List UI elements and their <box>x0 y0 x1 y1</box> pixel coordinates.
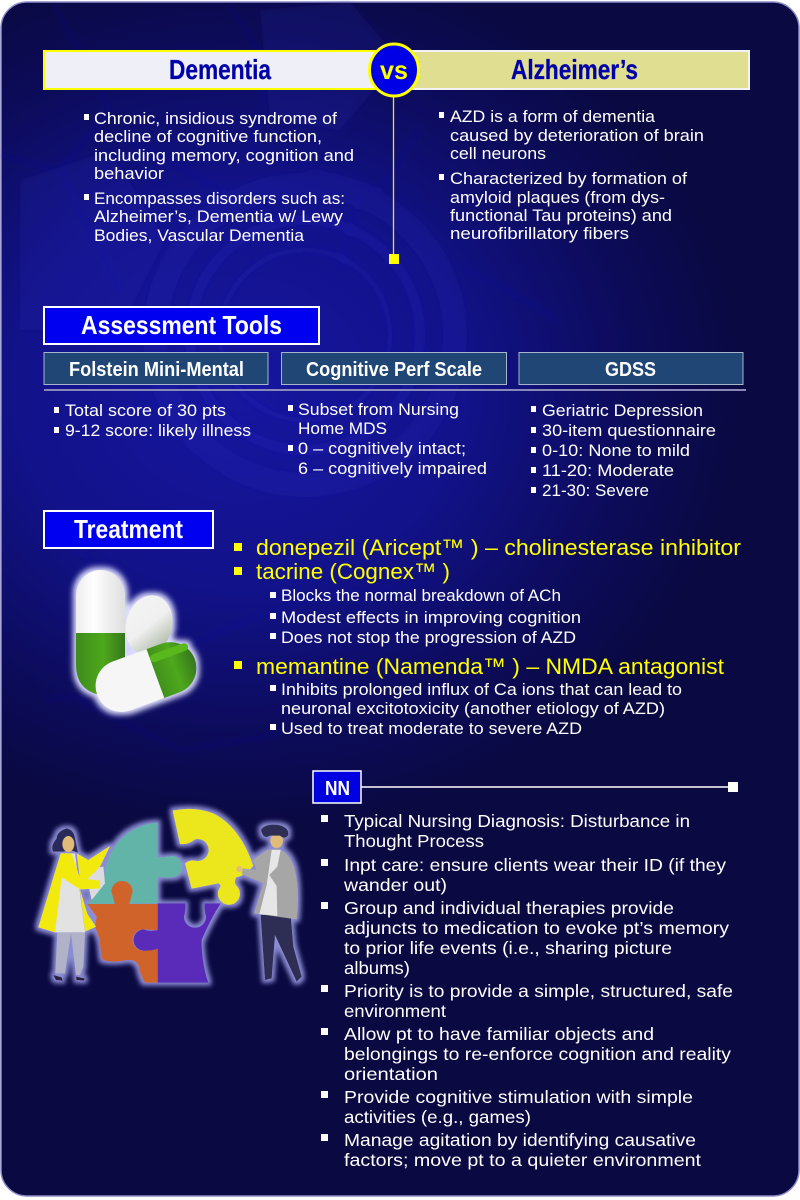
vs connector line <box>389 95 399 264</box>
heading: nn with rule <box>313 771 738 803</box>
text block: alzheimer's description: caused by deterioration of brain <box>450 126 704 145</box>
teal piece <box>88 823 182 904</box>
list: nursing notes: Priority is to provide a simple, structured, safe <box>344 981 733 1001</box>
text block: cognitive perf scale details: 6 – cognitively impaired <box>298 459 487 478</box>
yellow piece <box>173 809 253 905</box>
text block: dementia description: Alzheimer’s, Dementia w/ Lewy <box>94 207 344 226</box>
text block: cognitive perf scale details <box>288 400 487 478</box>
text block: folstein details: Total score of 30 pts <box>65 401 226 420</box>
tab: gdss <box>519 352 743 384</box>
list: nursing notes: Group and individual therapies provide <box>344 898 674 918</box>
vs badge: vs <box>380 55 408 85</box>
heading: nn with rule: NN <box>325 777 350 800</box>
list: drug treatments: Used to treat moderate to severe AZD <box>281 719 582 738</box>
purple piece <box>133 903 221 983</box>
text block: alzheimer's description: neurofibrillatory fibers <box>450 224 629 243</box>
text block: cognitive perf scale details: 0 – cognitively intact; <box>298 439 466 458</box>
text block: folstein details: 9-12 score: likely illness <box>65 421 251 440</box>
text block: dementia description: Chronic, insidious syndrome of <box>94 109 337 128</box>
woman <box>38 828 110 981</box>
list: drug treatments: memantine (Namenda™ ) – NMDA antagonist <box>256 654 725 679</box>
heading: assessment tools: Assessment Tools <box>81 310 282 340</box>
text block: alzheimer's description: AZD is a form of dementia <box>450 107 656 126</box>
text block: gdss details: 0-10: None to mild <box>542 441 690 460</box>
list: drug treatments: neuronal excitotoxicity (another etiology of AZD) <box>281 699 665 718</box>
dementia title bar: Dementia <box>169 54 271 85</box>
tab: folstein mini-mental: Folstein Mini-Mental <box>69 358 244 381</box>
heading: assessment tools <box>44 307 319 344</box>
list: drug treatments: Does not stop the progression of AZD <box>281 628 576 647</box>
text block: gdss details: 11-20: Moderate <box>542 461 674 480</box>
list: nursing notes: orientation <box>344 1064 438 1084</box>
text block: gdss details: Geriatric Depression <box>542 401 703 420</box>
alzheimer's title bar: Alzheimer’s <box>511 54 638 85</box>
man <box>236 825 302 982</box>
text block: cognitive perf scale details: Subset from Nursing <box>298 400 459 419</box>
tab: cognitive perf scale: Cognitive Perf Scale <box>306 358 482 381</box>
alzheimer's title bar <box>402 51 749 89</box>
text block: alzheimer's description: functional Tau proteins) and <box>450 206 672 225</box>
tab: cognitive perf scale <box>282 352 506 384</box>
list: nursing notes: Provide cognitive stimulation with simple <box>344 1087 693 1107</box>
list: nursing notes: Typical Nursing Diagnosis: Disturbance in <box>344 811 690 831</box>
list: nursing notes: environment <box>344 1001 446 1021</box>
text block: dementia description: including memory, cognition and <box>94 146 354 165</box>
orange piece <box>87 881 158 983</box>
text block: alzheimer's description <box>439 107 704 243</box>
list: drug treatments <box>234 535 742 738</box>
tab: gdss: GDSS <box>605 358 656 381</box>
vs badge <box>370 44 418 96</box>
list: nursing notes: Inpt care: ensure clients wear their ID (if they <box>344 855 726 875</box>
list: nursing notes: albums) <box>344 958 410 978</box>
list: drug treatments: donepezil (Aricept™ ) – cholinesterase inhibitor <box>256 535 742 560</box>
list: nursing notes: to prior life events (i.e., sharing picture <box>344 938 672 958</box>
text block: folstein details <box>54 401 251 440</box>
text block: cognitive perf scale details: Home MDS <box>298 419 387 438</box>
list: drug treatments: tacrine (Cognex™ ) <box>256 559 450 584</box>
list: nursing notes: Allow pt to have familiar objects and <box>344 1024 654 1044</box>
icon: capsule pills <box>76 570 204 719</box>
heading: treatment <box>44 511 213 548</box>
illustration: puzzle head with two people <box>38 809 302 983</box>
text block: dementia description <box>84 109 354 245</box>
list: nursing notes: belongings to re-enforce cognition and reality <box>344 1044 731 1064</box>
text block: dementia description: Encompasses disorders such as: <box>94 189 345 208</box>
list: nursing notes: Thought Process <box>344 831 484 851</box>
tab: folstein mini-mental <box>44 352 268 384</box>
text block: dementia description: decline of cognitive function, <box>94 127 322 146</box>
text block: alzheimer's description: cell neurons <box>450 144 546 163</box>
panel: assessment tool headers <box>44 352 746 390</box>
list: nursing notes <box>321 811 733 1170</box>
list: nursing notes: activities (e.g., games) <box>344 1107 531 1127</box>
heading: treatment: Treatment <box>74 514 183 544</box>
text block: gdss details: 30-item questionnaire <box>542 421 716 440</box>
list: nursing notes: adjuncts to medication to evoke pt’s memory <box>344 918 729 938</box>
list: drug treatments: Inhibits prolonged influx of Ca ions that can lead to <box>281 680 682 699</box>
list: nursing notes: wander out) <box>343 875 447 895</box>
text block: alzheimer's description: Characterized by formation of <box>450 169 687 188</box>
text block: gdss details: 21-30: Severe <box>542 481 649 500</box>
list: nursing notes: factors; move pt to a quieter environment <box>344 1150 701 1170</box>
list: nursing notes: Manage agitation by identifying causative <box>344 1130 696 1150</box>
dementia title bar <box>44 51 384 89</box>
text block: dementia description: Bodies, Vascular Dementia <box>94 226 305 245</box>
list: drug treatments: Modest effects in improving cognition <box>281 608 581 627</box>
text block: alzheimer's description: amyloid plaques (from dys- <box>450 188 665 207</box>
text block: gdss details <box>531 401 716 500</box>
panel: dementia vs alzheimer's header <box>44 44 749 264</box>
list: drug treatments: Blocks the normal breakdown of ACh <box>281 586 561 605</box>
text block: dementia description: behavior <box>94 164 164 183</box>
